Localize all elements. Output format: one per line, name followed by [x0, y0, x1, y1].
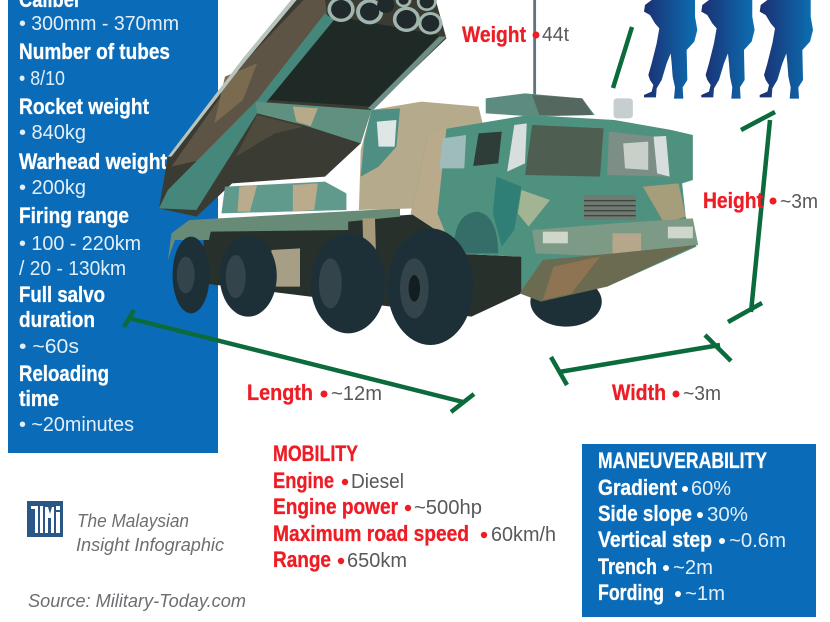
antenna — [533, 0, 536, 100]
trench: ~2m — [673, 557, 713, 579]
label: width: Width — [612, 380, 666, 405]
label: height: ~3m — [780, 191, 818, 213]
spec: number of tubes: • 8/10 — [19, 68, 65, 90]
label: length — [247, 380, 382, 405]
bumper — [532, 218, 698, 257]
height arrow — [728, 112, 775, 322]
credit text: Insight Infographic — [76, 535, 224, 555]
label: weight — [462, 22, 569, 47]
spec: caliber: • 300mm - 370mm — [19, 13, 179, 35]
spec: caliber — [19, 0, 179, 35]
windows — [439, 135, 466, 168]
wheels — [172, 228, 602, 345]
mobility: engine power — [273, 494, 482, 519]
spec: reloading time: • ~20minutes — [19, 414, 134, 436]
soldier 3 — [760, 0, 813, 99]
spec: firing range: • 100 - 220km — [19, 233, 141, 255]
truck illustration — [159, 0, 698, 345]
spec: number of tubes: Number of tubes — [19, 39, 170, 64]
vertical step: Vertical step — [598, 527, 712, 552]
side slope: 30% — [707, 504, 748, 526]
spec: firing range: Firing range — [19, 203, 129, 228]
spec: firing range: / 20 - 130km — [19, 258, 126, 280]
mobility: engine: Diesel — [351, 471, 404, 493]
label: length: Length — [247, 380, 313, 405]
spec: rocket weight: • 840kg — [19, 122, 86, 144]
spec: rocket weight: Rocket weight — [19, 94, 150, 119]
spec: full salvo duration: • ~60s — [19, 336, 79, 358]
radiator top unit — [486, 93, 595, 117]
trench — [598, 554, 713, 579]
mobility: engine: Engine — [273, 468, 334, 493]
label: width — [612, 380, 721, 405]
soldier silhouettes — [644, 0, 813, 99]
spec: number of tubes — [19, 39, 170, 90]
mobility: maximum road speed: Maximum road speed — [273, 521, 469, 546]
spec: full salvo duration: Full salvo — [19, 282, 105, 307]
fording: Fording — [598, 580, 664, 605]
grille — [584, 195, 636, 220]
side slope: Side slope — [598, 501, 692, 526]
soldier 1 — [644, 0, 697, 99]
soldier 2 — [701, 0, 755, 99]
label: width: ~3m — [683, 383, 721, 405]
fording: ~1m — [685, 583, 725, 605]
maneuverability heading: MANEUVERABILITY — [598, 448, 767, 473]
mobility: range: 650km — [347, 550, 407, 572]
source text: Source: Military-Today.com — [28, 591, 246, 611]
label: height — [703, 188, 818, 213]
spec: reloading time: time — [19, 386, 59, 411]
mobility: range — [273, 547, 407, 572]
beacon — [614, 98, 633, 118]
gradient: Gradient — [598, 475, 678, 500]
mobility: engine — [273, 468, 404, 493]
spec: firing range — [19, 203, 141, 280]
spec: full salvo duration — [19, 282, 105, 358]
mobility: range: Range — [273, 547, 331, 572]
turntable — [221, 182, 346, 213]
vertical step: ~0.6m — [729, 530, 786, 552]
mobility: engine power: Engine power — [273, 494, 398, 519]
length arrow — [124, 310, 474, 412]
dimension lines — [124, 27, 775, 412]
spec: rocket weight — [19, 94, 150, 144]
trench: Trench — [598, 554, 657, 579]
spec: reloading time: Reloading — [19, 361, 109, 386]
label: weight: Weight — [462, 22, 527, 47]
label: length: ~12m — [331, 383, 382, 405]
soldier height mark — [613, 27, 632, 88]
rear cabin — [359, 102, 484, 210]
panel: mobility — [273, 441, 556, 572]
skid plate — [520, 245, 696, 302]
mobility: maximum road speed: 60km/h — [491, 524, 556, 546]
credit text: The Malaysian — [77, 511, 189, 531]
spec: warhead weight — [19, 149, 168, 199]
label: height: Height — [703, 188, 764, 213]
rocket launcher — [159, 0, 446, 217]
panel: specifications — [8, 0, 218, 453]
gradient — [598, 475, 731, 500]
spec: full salvo duration: duration — [19, 307, 95, 332]
label: weight: 44t — [542, 24, 569, 46]
front cab — [411, 115, 696, 293]
fording — [598, 580, 725, 605]
spec: reloading time — [19, 361, 134, 436]
chassis — [204, 213, 521, 317]
spec: warhead weight: • 200kg — [19, 177, 86, 199]
mobility: engine power: ~500hp — [414, 497, 482, 519]
logo: TMI — [27, 501, 63, 537]
credit text — [76, 511, 224, 555]
panel: maneuverability — [582, 444, 816, 617]
width arrow — [551, 335, 731, 385]
spec: warhead weight: Warhead weight — [19, 149, 168, 174]
vertical step — [598, 527, 786, 552]
mobility heading: MOBILITY — [273, 441, 358, 466]
gradient: 60% — [691, 478, 731, 500]
